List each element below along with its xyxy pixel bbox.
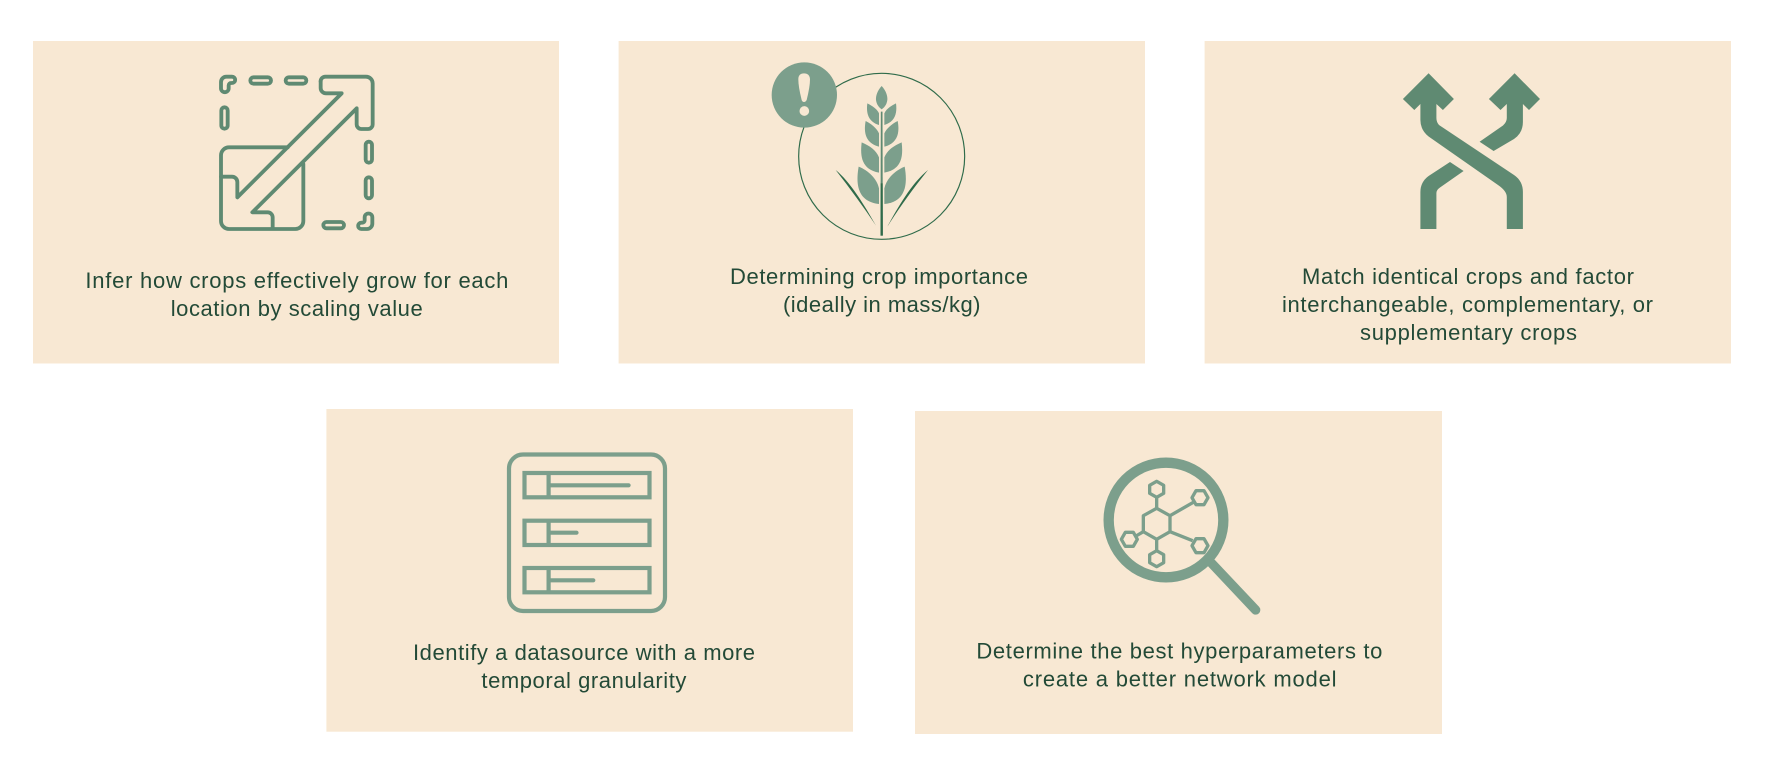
caption: infer crop growth: Infer how crops effectively grow for each (85, 268, 508, 293)
panel: hyperparameters (915, 411, 1442, 734)
caption: data source: Identify a datasource with a more (413, 640, 755, 665)
panel: infer crop growth (33, 41, 559, 364)
caption: crop importance: (ideally in mass/kg) (783, 292, 980, 317)
icon: magnifier over molecule (1109, 463, 1256, 610)
panel: crop importance (619, 41, 1145, 364)
caption: infer crop growth: location by scaling value (171, 296, 423, 321)
panel: data source (326, 409, 853, 732)
panel background (915, 411, 1442, 734)
icon: wheat in circle with alert badge (772, 62, 965, 239)
caption: hyperparameters: Determine the best hyperparameters to (976, 639, 1382, 664)
icon: scaling square with diagonal arrow (221, 77, 373, 229)
caption: match crops (1282, 264, 1653, 345)
caption: hyperparameters (976, 639, 1382, 692)
caption: match crops: Match identical crops and factor (1302, 264, 1634, 289)
caption: data source: temporal granularity (481, 668, 686, 693)
panel background (1205, 41, 1731, 364)
panel: match crops (1205, 41, 1731, 364)
panel background (326, 409, 853, 732)
panel background (619, 41, 1145, 364)
caption: match crops: supplementary crops (1360, 320, 1577, 345)
caption: match crops: interchangeable, complementary, or (1282, 292, 1653, 317)
caption: crop importance (730, 264, 1028, 317)
caption: hyperparameters: create a better network model (1023, 667, 1336, 692)
caption: infer crop growth (85, 268, 508, 321)
icon: crossing arrows (1403, 73, 1540, 229)
caption: crop importance: Determining crop importance (730, 264, 1028, 289)
caption: data source (413, 640, 755, 693)
panel background (33, 41, 559, 364)
icon: data table (509, 454, 665, 611)
